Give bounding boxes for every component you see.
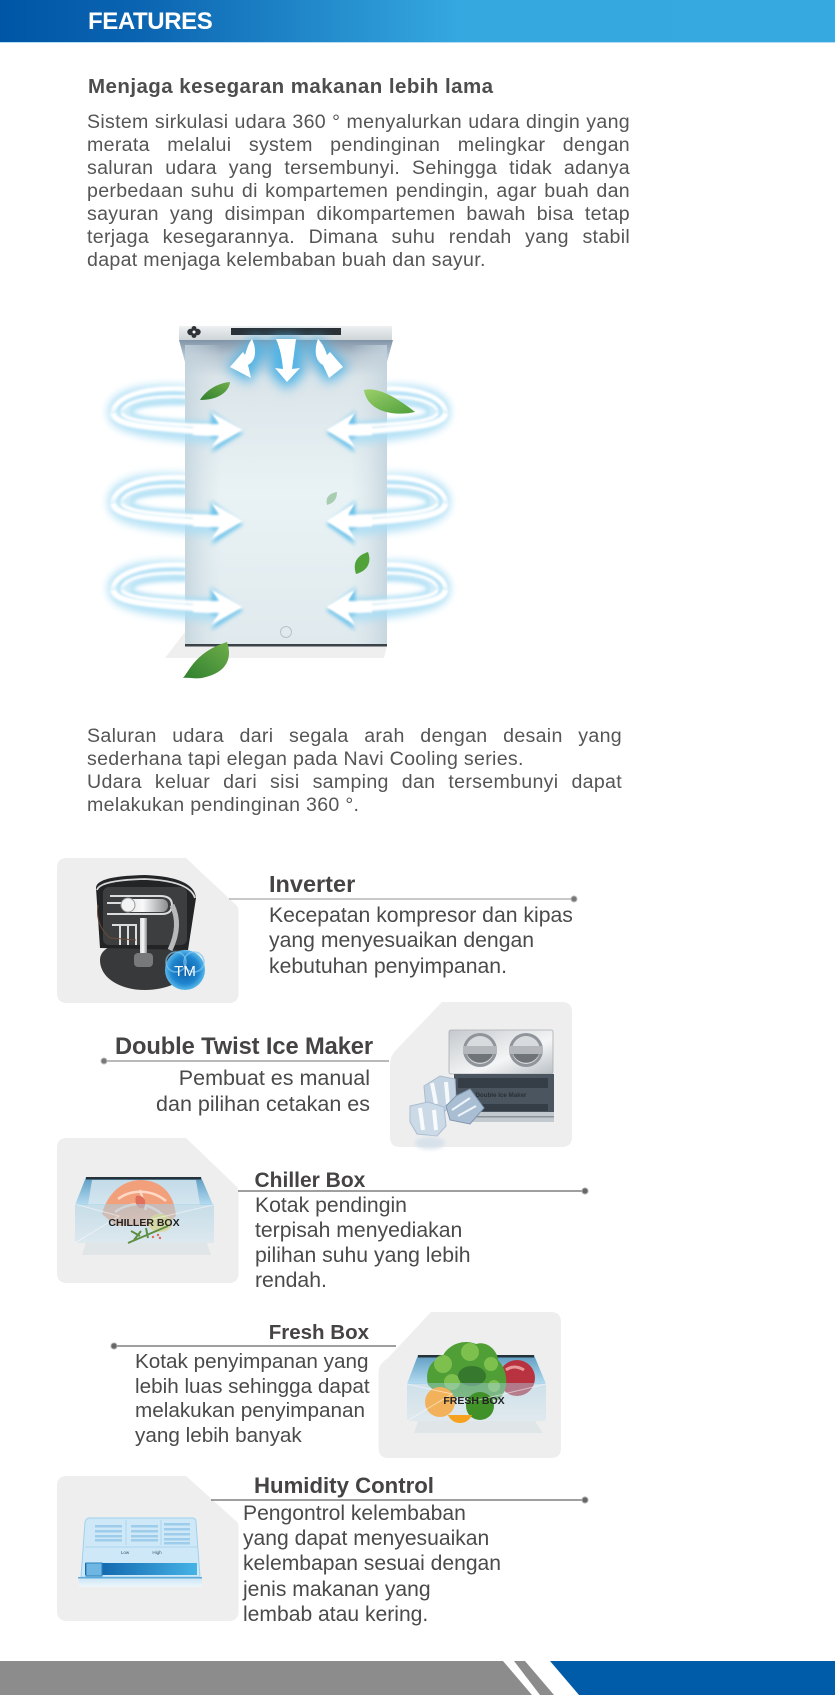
panel: double twist ice maker	[390, 1002, 572, 1149]
top panel	[179, 326, 392, 340]
text: humidity control: yang dapat menyesuaikan	[243, 1527, 489, 1550]
illustration: ice maker unit	[449, 1030, 554, 1122]
text: chiller box: rendah.	[255, 1269, 327, 1292]
text block: navi cooling description: melakukan pendinginan 360 °.	[87, 794, 359, 816]
text block: navi cooling description	[87, 725, 622, 816]
text: fresh box: yang lebih banyak	[135, 1424, 302, 1447]
text: humidity control: Pengontrol kelembaban	[243, 1502, 466, 1525]
text: chiller box: Kotak pendingin	[255, 1194, 407, 1217]
text block: airflow description: Sistem sirkulasi udara 360 ° menyalurkan udara dingin yang	[87, 110, 630, 132]
text: chiller box	[255, 1194, 471, 1292]
text: chiller box: pilihan suhu yang lebih	[255, 1244, 471, 1267]
heading: double twist ice maker: Double Twist Ice Maker	[115, 1034, 373, 1060]
illustration: humidity control panel: High	[152, 1550, 162, 1555]
illustration: ice maker unit: Double Ice Maker	[476, 1092, 527, 1099]
heading: inverter: Inverter	[269, 871, 355, 897]
panel: inverter	[57, 858, 239, 1003]
icon: compressor	[96, 875, 196, 990]
text block: navi cooling description: sederhana tapi elegan pada Navi Cooling series.	[87, 748, 524, 770]
panel: fresh box	[379, 1312, 561, 1458]
connector: fresh box	[111, 1343, 396, 1349]
illustration: chiller drawer with salmon	[75, 1177, 214, 1255]
text: fresh box: lebih luas sehingga dapat	[135, 1375, 370, 1398]
footer band	[0, 1661, 835, 1695]
airflow swirls behind the cabinet	[113, 389, 446, 590]
text: fresh box: melakukan penyimpanan	[135, 1399, 365, 1422]
panel: chiller box	[57, 1138, 239, 1283]
text: inverter: Kecepatan kompresor dan kipas	[269, 904, 573, 926]
leaves	[183, 382, 415, 678]
text block: airflow description: sayuran yang disimpan dikompartemen bawah bisa tetap	[87, 202, 630, 224]
text: double twist ice maker	[156, 1066, 370, 1116]
icon: TM badge: TM	[174, 963, 196, 980]
connector: humidity control	[211, 1497, 588, 1503]
illustration: ice cubes	[410, 1076, 484, 1149]
title: features: FEATURES	[88, 8, 212, 35]
illustration: fresh box drawer with vegetables: FRESH BOX	[443, 1395, 505, 1407]
text block: airflow description: saluran udara yang tersembunyi. Sehingga tidak adanya	[87, 156, 630, 178]
connector: inverter	[229, 896, 577, 902]
connector: chiller box	[238, 1188, 588, 1194]
text: humidity control: kelembapan sesuai dengan	[243, 1552, 501, 1575]
heading: humidity control: Humidity Control	[254, 1472, 434, 1498]
illustration: fresh box drawer with vegetables	[407, 1342, 546, 1433]
heading: freshness: Menjaga kesegaran makanan lebih lama	[88, 75, 494, 98]
top vent arrows	[230, 339, 343, 384]
illustration: humidity control panel: Low	[121, 1550, 130, 1555]
text: double twist ice maker: dan pilihan cetakan es	[156, 1092, 370, 1116]
panel: humidity control	[57, 1476, 239, 1621]
icon: TM badge	[165, 950, 205, 990]
floor shadow	[165, 632, 387, 658]
text block: airflow description: dapat menjaga kelembaban buah dan sayur.	[87, 248, 486, 270]
text: humidity control: lembab atau kering.	[243, 1603, 428, 1626]
text block: airflow description: merata melalui system pendinginan melingkar dengan	[87, 134, 630, 156]
fan logo	[187, 326, 201, 338]
text block: airflow description: perbedaan suhu di kompartemen pendingin, agar buah dan	[87, 180, 630, 202]
text block: airflow description: terjaga kesegarannya. Dimana suhu rendah yang stabil	[87, 226, 630, 248]
text: chiller box: terpisah menyediakan	[255, 1219, 462, 1242]
text: inverter	[269, 904, 573, 978]
text block: airflow description	[87, 110, 630, 270]
text: double twist ice maker: Pembuat es manual	[179, 1066, 370, 1090]
text: fresh box: Kotak penyimpanan yang	[135, 1350, 368, 1373]
heading: chiller box: Chiller Box	[254, 1168, 365, 1192]
text: fresh box	[135, 1350, 370, 1447]
heading: fresh box: Fresh Box	[269, 1320, 369, 1344]
illustration: humidity control panel	[78, 1518, 202, 1587]
text: humidity control	[242, 1502, 501, 1626]
text block: navi cooling description: Saluran udara dari segala arah dengan desain yang	[87, 725, 622, 747]
connector: double twist ice maker	[101, 1058, 389, 1064]
text block: navi cooling description: Udara keluar dari sisi samping dan tersembunyi dapat	[87, 771, 622, 793]
illustration: chiller drawer with salmon: CHILLER BOX	[108, 1217, 180, 1229]
text: inverter: yang menyesuaikan dengan	[269, 929, 534, 952]
airflow arrows in front	[113, 411, 446, 630]
text: inverter: kebutuhan penyimpanan.	[269, 954, 507, 978]
illustration: refrigerator with 360 degree airflow	[113, 326, 446, 678]
button	[280, 626, 292, 638]
cabinet body	[179, 340, 393, 645]
header bar	[0, 0, 835, 43]
text: humidity control: jenis makanan yang	[243, 1578, 431, 1601]
